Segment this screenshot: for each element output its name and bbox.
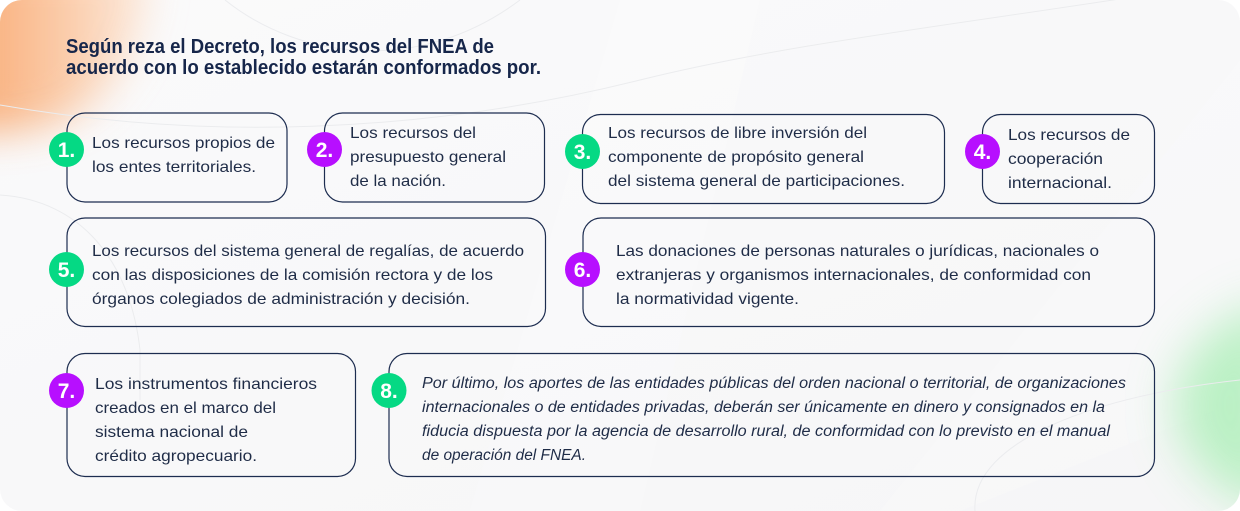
card 8: 8. bbox=[380, 380, 398, 403]
card 4: cooperación bbox=[1008, 151, 1103, 168]
card 2: Los recursos del bbox=[350, 125, 476, 142]
card 7 bbox=[49, 354, 356, 476]
card 5: 5. bbox=[58, 259, 75, 282]
card 5: órganos colegiados de administración y decisión. bbox=[92, 291, 470, 308]
card 1: Los recursos propios de bbox=[92, 135, 275, 152]
title: acuerdo con lo establecido estarán conformados por. bbox=[66, 57, 541, 79]
card 3: componente de propósito general bbox=[608, 149, 864, 166]
card 2: de la nación. bbox=[350, 173, 446, 190]
card 5: con las disposiciones de la comisión rectora y de los bbox=[92, 267, 493, 284]
title bbox=[66, 36, 541, 79]
card 8: Por último, los aportes de las entidades públicas del orden nacional o territorial, de organizaciones bbox=[422, 375, 1126, 392]
card 4 bbox=[965, 114, 1154, 204]
card 6: Las donaciones de personas naturales o jurídicas, nacionales o bbox=[616, 243, 1099, 260]
card 8: internacionales o de entidades privadas, deberán ser únicamente en dinero y consignados en la bbox=[422, 399, 1105, 416]
card 1 bbox=[49, 113, 287, 202]
card 1: 1. bbox=[58, 139, 75, 162]
card 4: Los recursos de bbox=[1008, 127, 1130, 144]
card 1: los entes territoriales. bbox=[92, 159, 256, 176]
card 3 bbox=[565, 114, 944, 204]
card 2: presupuesto general bbox=[350, 149, 506, 166]
orange blob bbox=[0, 0, 150, 133]
card 8 bbox=[372, 354, 1154, 476]
card 7: sistema nacional de bbox=[95, 424, 248, 441]
card 5: Los recursos del sistema general de regalías, de acuerdo bbox=[92, 243, 524, 260]
card 2: 2. bbox=[316, 139, 333, 162]
card 6: extranjeras y organismos internacionales, de conformidad con bbox=[616, 267, 1091, 284]
green blob bbox=[1175, 300, 1240, 511]
card 7: crédito agropecuario. bbox=[95, 448, 257, 465]
card 6: 6. bbox=[574, 259, 591, 282]
card 7: Los instrumentos financieros bbox=[95, 376, 317, 393]
title: Según reza el Decreto, los recursos del FNEA de bbox=[66, 36, 494, 58]
card 8: fiducia dispuesta por la agencia de desarrollo rural, de conformidad con lo previsto en el manual bbox=[422, 423, 1111, 440]
card 2 bbox=[307, 113, 544, 202]
card 6: la normatividad vigente. bbox=[616, 291, 799, 308]
card 6 bbox=[565, 218, 1154, 326]
card 3: del sistema general de participaciones. bbox=[608, 173, 905, 190]
card 7: 7. bbox=[58, 380, 75, 403]
card 7: creados en el marco del bbox=[95, 400, 276, 417]
card 4: 4. bbox=[974, 141, 991, 164]
card 3: Los recursos de libre inversión del bbox=[608, 125, 867, 142]
card 4: internacional. bbox=[1008, 175, 1112, 192]
card 3: 3. bbox=[574, 141, 591, 164]
card 5 bbox=[49, 218, 546, 326]
card 8: de operación del FNEA. bbox=[422, 447, 586, 464]
